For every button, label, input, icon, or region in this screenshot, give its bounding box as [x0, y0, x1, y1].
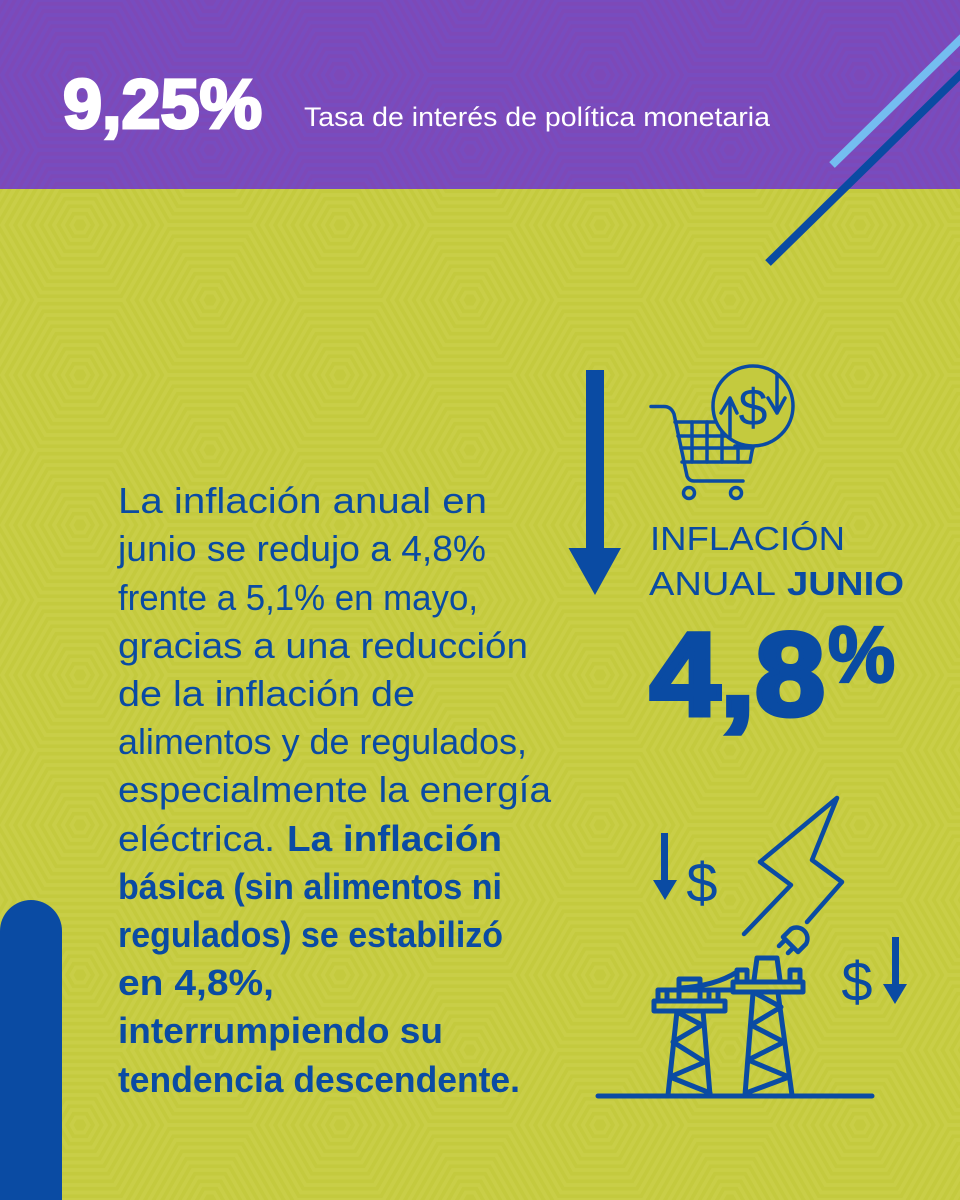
body text block: regulados) se estabilizó	[118, 914, 503, 955]
decorative rounded bar	[0, 900, 62, 1200]
body text block: eléctrica.	[118, 818, 275, 859]
icon: shopping cart with price circle: $	[739, 379, 768, 437]
icon: dollar with down arrow, right	[841, 937, 907, 1013]
arrow: large down arrow	[568, 370, 621, 595]
body text block: alimentos y de regulados,	[118, 721, 527, 762]
panel: purple header band	[0, 0, 960, 189]
heading: inflación anual junio: ANUAL	[649, 565, 776, 602]
body text block: frente a 5,1% en mayo,	[118, 577, 478, 618]
body text block: La inflación anual en	[118, 480, 487, 521]
heading: inflación anual junio: JUNIO	[787, 565, 904, 602]
icon: down arrow with dollar, left	[653, 833, 718, 914]
key figure: 4,8%	[650, 609, 895, 741]
body text block: básica (sin alimentos ni	[118, 866, 502, 907]
heading: inflación anual junio: INFLACIÓN	[650, 520, 845, 557]
key figure: 4,8%: 4,8	[650, 609, 825, 741]
icon: down arrow with dollar, left: $	[686, 851, 718, 914]
body text block: especialmente la energía	[118, 769, 552, 810]
body text block: interrumpiendo su	[118, 1010, 443, 1051]
body text block	[117, 480, 552, 1100]
key figure: 4,8%: %	[828, 610, 895, 699]
header label: Tasa de interés de política monetaria	[304, 102, 771, 132]
icon: electricity towers	[598, 958, 872, 1096]
body text block: La inflación	[287, 818, 502, 859]
body text block: tendencia descendente.	[118, 1059, 520, 1100]
icon: dollar with down arrow, right: $	[841, 950, 873, 1013]
body text block: en 4,8%,	[118, 962, 274, 1003]
body text block: gracias a una reducción	[118, 625, 528, 666]
heading: inflación anual junio	[649, 520, 904, 602]
decorative diagonal: light blue	[832, 34, 960, 165]
body text block: junio se redujo a 4,8%	[117, 528, 486, 569]
header figure: 9,25%: 9,25%	[63, 65, 262, 143]
icon: lightning bolt cable with plug	[744, 798, 842, 953]
body text block: de la inflación de	[118, 673, 415, 714]
decorative diagonal: dark blue	[768, 69, 960, 263]
icon: shopping cart with price circle	[651, 366, 793, 498]
